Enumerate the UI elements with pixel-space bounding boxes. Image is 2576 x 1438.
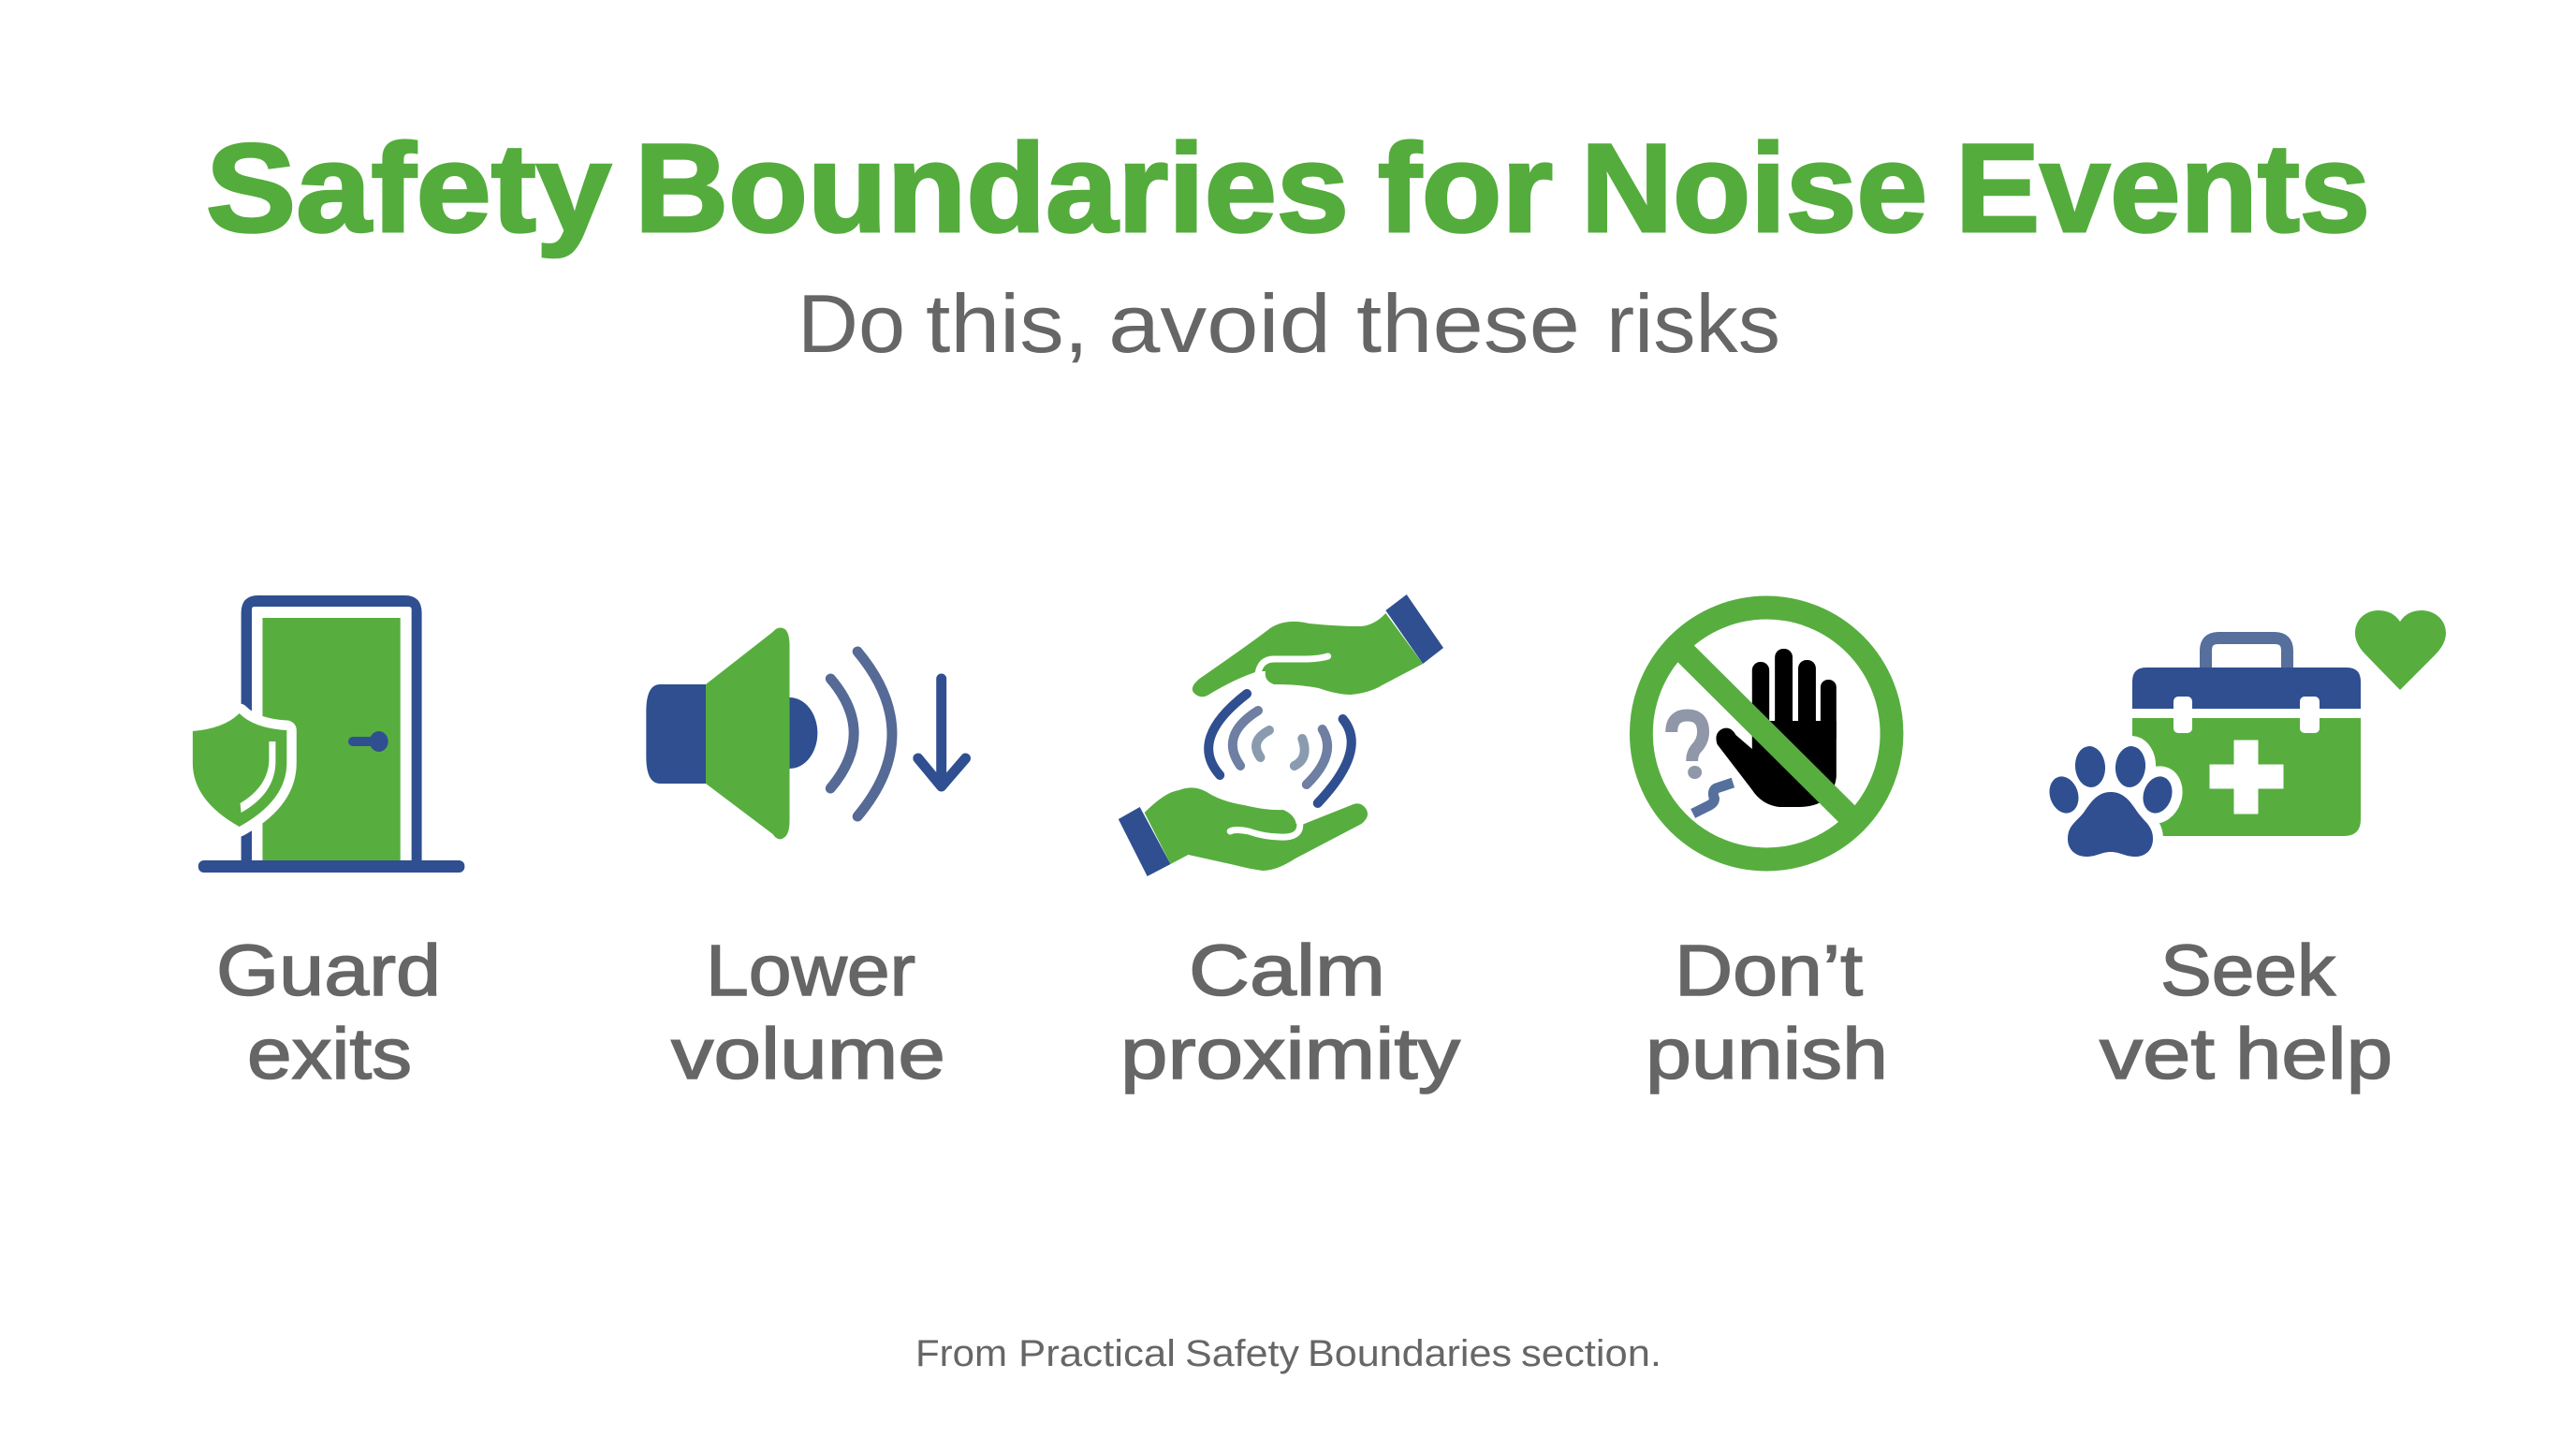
medical cross [2210,741,2283,814]
item: calm proximity [1119,594,1461,1094]
footer note: section. [1521,1333,1661,1374]
icon: door with shield [193,595,464,873]
calm waves [1208,694,1352,803]
sound waves [830,652,892,816]
label: lower volume: volume [671,1014,945,1094]
label: calm proximity: Calm [1189,931,1385,1011]
label: guard exits: Guard [216,931,441,1011]
item: lower volume [646,628,966,1094]
label: seek vet help: help [2235,1014,2393,1094]
subtitle: Do [798,277,905,370]
shield [193,713,286,827]
icon: prohibited hand [1641,608,1892,859]
title: Boundaries [635,119,1349,258]
title: Noise [1581,119,1927,258]
label: lower volume: Lower [706,931,915,1011]
door frame [242,595,422,866]
speaker dome [762,697,817,769]
label: don't punish: Don’t [1675,931,1863,1011]
top hand [1193,613,1423,697]
kit latches [2174,697,2192,733]
paw halo [2045,745,2176,857]
label: guard exits: exits [247,1014,412,1094]
title: Safety [206,119,611,258]
door panel [262,618,401,860]
bottom cuff [1119,807,1171,876]
title: for [1378,119,1553,258]
label: don't punish: punish [1646,1014,1888,1094]
subtitle: this, [926,277,1089,370]
kit lid [2132,668,2361,709]
heart [2355,610,2446,690]
subtitle: these [1356,277,1580,370]
prohibition slash [1680,648,1852,818]
label: calm proximity: proximity [1120,1014,1461,1094]
door knob [348,731,388,752]
footer note: From [915,1333,1007,1374]
shield highlight [241,741,275,813]
title: Events [1955,119,2370,258]
speaker cone [706,628,790,839]
top cuff [1385,594,1443,664]
icon: two hands with calm waves [1119,594,1443,876]
threshold [198,860,464,873]
bottom hand [1145,787,1368,871]
shield halo [193,713,286,827]
top hand crease [1258,656,1328,673]
speaker body [646,684,706,784]
subtitle: risks [1606,277,1780,370]
paw [2045,745,2176,857]
icon: speaker with down arrow [646,628,966,839]
squiggle [1693,783,1733,814]
footer note: Practical [1018,1333,1176,1374]
item: seek vet help [2045,610,2446,1094]
kit handle [2205,638,2288,669]
kit body [2132,718,2361,836]
down arrow [918,679,966,786]
subtitle: avoid [1108,277,1331,370]
label: seek vet help: vet [2100,1014,2215,1094]
footer note: Safety [1185,1333,1299,1374]
label: seek vet help: Seek [2160,931,2336,1011]
bottom hand crease [1230,825,1300,837]
prohibition ring [1641,608,1892,859]
item: guard exits [193,595,464,1094]
footer note: Boundaries [1308,1333,1512,1374]
icon: vet kit with paw and heart [2045,610,2446,857]
item: don't punish [1641,608,1892,1094]
black hand [1716,649,1837,807]
question mark [1672,715,1704,779]
